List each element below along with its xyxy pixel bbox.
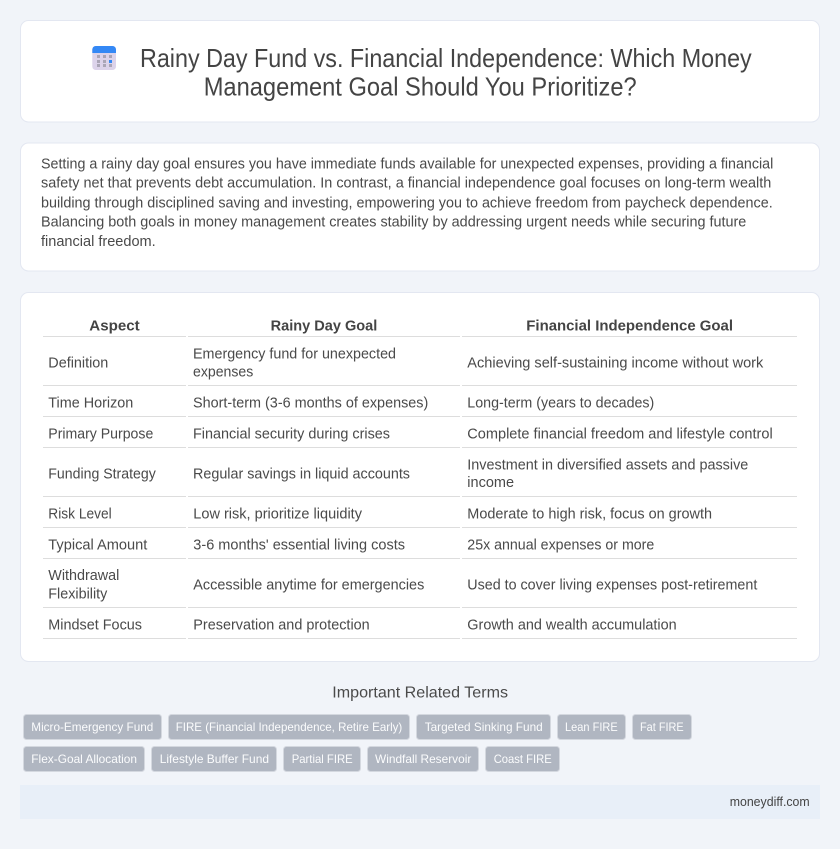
table row: definition: Definition [48,355,108,371]
table row: withdrawal flexibility: Withdrawal [48,568,119,584]
tag: Lean FIRE [558,714,626,740]
table header row: Rainy Day Goal [271,319,377,335]
tag: Targeted Sinking Fund: Targeted Sinking Fund [425,720,543,734]
table row: withdrawal flexibility: Flexibility [48,586,108,602]
tag: FIRE [168,714,410,740]
table row: time horizon: Long-term (years to decades) [467,395,654,411]
tags: related terms [24,714,692,772]
tag: Micro-Emergency Fund [24,714,162,740]
tag: Fat FIRE: Fat FIRE [640,720,684,734]
table row: typical amount: 25x annual expenses or more [467,537,654,553]
tag: Flex-Goal Allocation: Flex-Goal Allocation [31,752,137,766]
table row: time horizon [48,395,654,411]
footer: moneydiff.com [730,794,810,809]
table row: typical amount: Typical Amount [48,537,147,553]
tag: Partial FIRE: Partial FIRE [292,752,353,766]
table row: time horizon: Short-term (3-6 months of expenses) [193,395,428,411]
table row: primary purpose: Financial security during crises [193,426,390,442]
table row: primary purpose [48,426,773,442]
text block: introduction paragraph [41,156,773,250]
tag: Windfall Reservoir [368,746,478,772]
panel: introduction [20,143,820,271]
table row: funding strategy [48,457,748,491]
table header row: Financial Independence Goal [526,319,733,335]
tag: Lifestyle Buffer Fund [152,746,276,772]
tag: Targeted Sinking Fund [416,714,550,740]
table row: funding strategy: Funding Strategy [48,466,157,482]
table row: time horizon: Time Horizon [48,395,133,411]
table row: primary purpose: Complete financial freedom and lifestyle control [467,426,773,442]
tag: Coast FIRE: Coast FIRE [494,752,552,766]
table row: funding strategy: Investment in diversified assets and passive [467,457,748,473]
icon: calendar [92,46,116,70]
text block: introduction paragraph: safety net that prevents debt accumulation. In contrast, a financial independence goal focuses on long-term wealth [41,176,771,192]
table row: definition [48,346,764,380]
tag: Partial FIRE [284,746,360,772]
heading: important related terms: Important Related Terms [332,684,508,701]
tag: Flex-Goal Allocation [24,746,144,772]
title [140,45,752,102]
table row: typical amount [48,537,654,553]
tag: Lifestyle Buffer Fund: Lifestyle Buffer Fund [160,752,269,766]
table row: funding strategy: income [467,475,514,491]
tag: Fat FIRE [632,714,692,740]
panel: header [20,20,820,122]
tag: FIRE: FIRE (Financial Independence, Retire Early) [176,720,402,734]
table row: risk level: Low risk, prioritize liquidity [193,506,363,522]
text block: introduction paragraph: Setting a rainy day goal ensures you have immediate funds available for unexpected expenses, providing a financial [41,156,773,172]
table row: definition: Emergency fund for unexpected [193,346,396,362]
table row: definition: Achieving self-sustaining income without work [467,355,764,371]
table row: primary purpose: Primary Purpose [48,426,153,442]
text block: introduction paragraph: financial freedom. [41,234,156,250]
table header row: Aspect [89,319,140,335]
table header row [89,319,733,335]
table row: mindset focus [48,617,677,633]
footer [20,785,820,819]
text block: introduction paragraph: Balancing both goals in money management creates stability by addressing urgent needs while securing future [41,215,746,231]
title: Rainy Day Fund vs. Financial Independence: Which Money [140,45,752,73]
table row: mindset focus: Preservation and protection [193,617,370,633]
text block: introduction paragraph: building through disciplined saving and investing, empowering you to achieve freedom from paycheck dependence. [41,195,773,211]
tag: Windfall Reservoir: Windfall Reservoir [375,752,471,766]
table row: definition: expenses [193,364,253,380]
table row: risk level [48,506,712,522]
panel: comparison table [20,292,820,662]
table row: risk level: Moderate to high risk, focus on growth [467,506,712,522]
tag: Coast FIRE [486,746,560,772]
table row: typical amount: 3-6 months' essential living costs [193,537,405,553]
table row: mindset focus: Growth and wealth accumulation [467,617,677,633]
tag: Lean FIRE: Lean FIRE [565,720,618,734]
table row: withdrawal flexibility [48,568,757,602]
title: Management Goal Should You Prioritize? [204,74,637,102]
table row: risk level: Risk Level [48,506,112,522]
tag: Micro-Emergency Fund: Micro-Emergency Fund [31,720,153,734]
table row: funding strategy: Regular savings in liquid accounts [193,466,410,482]
table row: withdrawal flexibility: Accessible anytime for emergencies [193,577,424,593]
table row: mindset focus: Mindset Focus [48,617,142,633]
table row: withdrawal flexibility: Used to cover living expenses post-retirement [467,577,757,593]
